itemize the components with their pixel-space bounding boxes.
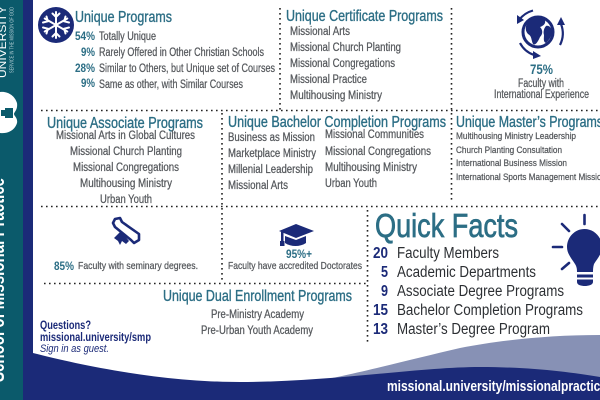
program list: Pre-Ministry Academy: [211, 309, 304, 321]
icon: globe with arrows: [517, 10, 565, 59]
program list: Church Planting Consultation: [456, 145, 562, 156]
program list: Multihousing Ministry: [290, 90, 382, 102]
program list: [290, 26, 401, 102]
stat caption: [494, 78, 589, 101]
statistics list: 9%: [81, 76, 95, 90]
questions contact block: missional.university/smp: [40, 332, 151, 344]
program list: Pre-Urban Youth Academy: [201, 325, 313, 337]
icon: snowflake: [38, 7, 74, 43]
icon: graduation cap: [279, 224, 314, 246]
questions contact block: Sign in as guest.: [40, 343, 109, 355]
left program list: Millenial Leadership: [228, 164, 313, 176]
icon: light bulb: [553, 215, 600, 286]
heading: Unique Programs: [75, 9, 172, 26]
panel: international faculty: [494, 10, 589, 101]
program list: Missional Practice: [290, 74, 367, 86]
left program list: Business as Mission: [228, 132, 315, 144]
statistics list: Rarely Offered in Other Christian Schools: [99, 47, 264, 59]
panel: seminary degrees: [54, 218, 198, 273]
panel: unique bachelor completion programs: [228, 114, 446, 192]
questions contact block: Questions?: [40, 320, 91, 332]
heading: Unique Dual Enrollment Programs: [163, 288, 352, 305]
facts list: 15: [373, 302, 388, 319]
statistics list: Similar to Others, but Unique set of Courses: [99, 63, 275, 75]
program list: Missional Arts: [290, 26, 350, 38]
facts list: 13: [373, 321, 388, 338]
footer wave dark: [33, 353, 600, 400]
sidebar seal: [0, 92, 17, 133]
program list: International Business Mission: [456, 158, 567, 169]
panel: quick facts: [373, 207, 600, 338]
icon: diploma: [113, 218, 139, 245]
program list: [56, 130, 195, 206]
right program list: Multihousing Ministry: [325, 162, 417, 174]
program list: [456, 131, 600, 183]
left program list: Marketplace Ministry: [228, 148, 316, 160]
facts list: Associate Degree Programs: [397, 283, 564, 300]
stat value: 95%+: [286, 247, 312, 261]
statistics list: [75, 29, 275, 91]
heading: Unique Associate Programs: [47, 115, 203, 132]
footer wave light: [305, 335, 600, 400]
program list: Multihousing Ministry: [80, 178, 172, 190]
program list: Missional Church Planting: [70, 146, 182, 158]
heading: Unique Bachelor Completion Programs: [228, 114, 446, 131]
panel: unique dual enrollment programs: [163, 288, 352, 337]
statistics list: 9%: [81, 45, 95, 59]
panel: unique certificate programs: [286, 8, 443, 102]
panel: accredited doctorates: [228, 224, 362, 272]
right program list: [325, 129, 431, 190]
heading: Quick Facts: [375, 207, 518, 244]
program list: Missional Church Planting: [290, 42, 401, 54]
statistics list: Totally Unique: [99, 31, 156, 43]
stat caption: Faculty have accredited Doctorates: [228, 260, 362, 272]
right program list: Missional Communities: [325, 129, 424, 141]
program list: Urban Youth: [100, 194, 152, 206]
stat value: 85%: [54, 259, 74, 273]
right program list: Missional Congregations: [325, 146, 431, 158]
program list: Missional Congregations: [290, 58, 395, 70]
program list: Missional Arts in Global Cultures: [56, 130, 195, 142]
facts list: [373, 245, 583, 338]
program list: Missional Congregations: [73, 162, 179, 174]
panel: unique master's programs: [456, 114, 600, 183]
statistics list: 54%: [75, 29, 95, 43]
stat caption: Faculty with: [518, 78, 564, 90]
program list: [201, 309, 313, 337]
stat caption: Faculty with seminary degrees.: [78, 260, 198, 272]
facts list: 9: [381, 283, 388, 300]
heading: Unique Certificate Programs: [286, 8, 443, 25]
facts list: Faculty Members: [397, 245, 499, 262]
questions contact block: [40, 320, 151, 355]
facts list: Master’s Degree Program: [397, 321, 550, 338]
left program list: Missional Arts: [228, 180, 288, 192]
facts list: 20: [373, 245, 388, 262]
panel: unique programs: [38, 7, 275, 91]
stat value: 75%: [530, 61, 553, 77]
statistics list: 28%: [75, 61, 95, 75]
panel: unique associate programs: [47, 115, 203, 206]
left program list: [228, 132, 316, 192]
sidebar: [0, 0, 33, 400]
statistics list: Same as other, with Similar Courses: [99, 79, 243, 91]
sidebar university name: [0, 5, 16, 78]
facts list: 5: [381, 264, 388, 281]
right program list: Urban Youth: [325, 178, 377, 190]
program list: Multihousing Ministry Leadership: [456, 131, 576, 142]
facts list: Academic Departments: [397, 264, 536, 281]
